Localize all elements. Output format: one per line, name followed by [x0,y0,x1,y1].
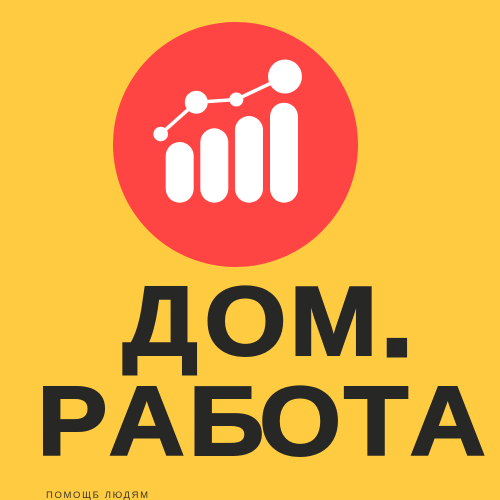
heading line 1: . [382,267,412,376]
heading line 1: ДОМ [122,267,378,376]
heading line 2: РАБОТА [37,367,486,476]
bar chart [166,103,298,203]
icon: red circle with growth chart [113,22,358,267]
line chart with dots [153,60,302,141]
